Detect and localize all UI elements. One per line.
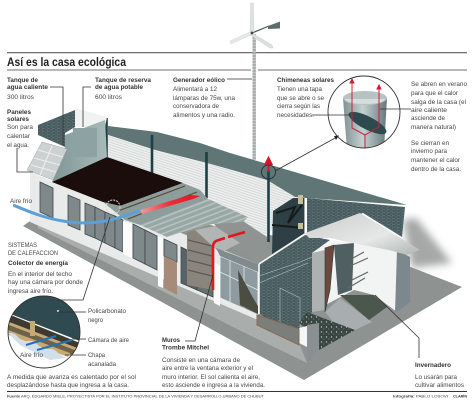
text: trombe wall: muro interior. El sol calienta el aire, (162, 375, 260, 381)
footer credits: Infografía: PABLO LOSOVI (393, 394, 448, 398)
icon: wind generator (230, 3, 280, 160)
text: heating systems: En el interior del techo (8, 272, 73, 278)
foundation (38, 215, 307, 363)
text: greenhouse (415, 363, 464, 389)
text: chimney notes (411, 82, 468, 173)
interior floor (213, 221, 305, 264)
plant bed (299, 312, 355, 350)
roof posts (106, 118, 268, 242)
text: trombe wall: Consiste en una cámara de (162, 358, 241, 364)
text: hot water tank: agua caliente (7, 85, 49, 91)
text: cold air: Aire frío (10, 199, 33, 205)
footer credits (7, 391, 467, 398)
text: heating systems: ingresa aire frío. (8, 289, 53, 295)
text: solar chimneys: Tienen una tapa (277, 87, 323, 93)
leader lines (17, 79, 419, 358)
roof rails section (103, 183, 208, 225)
text: chimney notes: Se abren en verano (411, 82, 468, 88)
text: chimney notes: invierno para (411, 149, 448, 155)
corrugated roof (140, 199, 248, 237)
text: chimney notes: Se cierran en (411, 141, 449, 147)
text: trombe wall: esto asciende e ingresa a la vivienda. (162, 383, 265, 389)
low pier (299, 326, 307, 347)
text: collector labels: negro (88, 318, 104, 324)
text: heating systems (8, 243, 84, 295)
text: hot water tank: Tanque de (7, 78, 39, 84)
brown lower window (257, 315, 299, 345)
text: solar panels (7, 110, 34, 149)
text: solar panels: el agua. (7, 143, 29, 149)
text: greenhouse: Invernadero (415, 363, 451, 369)
front wall (30, 172, 258, 320)
greenhouse floor (325, 298, 372, 330)
text: heating systems: DE CALEFACCION (8, 251, 58, 257)
text: wind generator: lámparas de 75w, una (173, 96, 236, 102)
text: chimney notes: aire caliente (411, 108, 448, 114)
text: reserve tank (95, 78, 152, 101)
text: solar panels: Son para (7, 125, 34, 131)
text: solar chimneys (277, 78, 335, 119)
house illustration (13, 108, 462, 380)
text: solar chimneys: Chimeneas solares (277, 78, 335, 84)
hot water tank enclosure (38, 108, 107, 182)
text: greenhouse: cultivar alimentos (415, 383, 464, 389)
text: heating systems: Colector de energía (8, 261, 69, 267)
text: chimney notes: para que el calor (411, 91, 458, 97)
title block: Así es la casa ecológica (7, 55, 126, 69)
text: trombe wall: aire entre la ventana exterior y el (162, 366, 253, 372)
text: collector labels: Chapa (88, 353, 106, 359)
small detail circle on roof (106, 200, 120, 214)
ground slab (23, 200, 462, 380)
warm air arrow (140, 195, 200, 214)
gable top wall (307, 198, 405, 237)
text: collector labels (20, 309, 130, 368)
footer credits: CLARÍN (453, 394, 467, 398)
text: wind generator (173, 78, 236, 119)
text: trombe wall (162, 338, 265, 389)
text: wind generator: Generador eólico (173, 78, 225, 84)
text: collector labels: acanalada (88, 362, 117, 368)
text: hot water tank (7, 78, 49, 101)
text: hot water tank: 300 litros (7, 95, 34, 101)
front gable wall (259, 235, 330, 343)
text: chimney notes: salga de la casa (el (411, 100, 466, 106)
text: trombe wall: Muros (162, 338, 181, 344)
cast shadow (403, 218, 452, 268)
chimney detail circle (328, 76, 400, 150)
text: solar chimneys: necesidades. (277, 113, 314, 119)
windows (40, 182, 213, 297)
arrow to chimney detail (275, 136, 339, 171)
text: solar chimneys: cierra según las (277, 104, 320, 110)
text: solar chimneys: que se abre o se (277, 96, 325, 102)
text: chimney notes: dentro de la casa. (411, 167, 461, 173)
text: collector note: desplazándose hasta que ingresa a la casa. (7, 383, 129, 389)
footer credits: Fuente ARQ. EDGARDO MIELE, PROYECTISTA POR EL INSTITUTO PROVINCIAL DE LA VIVIENDA Y DESARROLLO URBANO DE CHUBUT (7, 394, 265, 398)
text: heating systems: hay una cámara por donde (8, 280, 84, 286)
right white room (312, 240, 410, 313)
text: heating systems: SISTEMAS (8, 243, 37, 249)
text: chimney notes: asciende de (411, 116, 446, 122)
text: chimney notes: manera natural) (411, 125, 456, 131)
text: collector labels: Policarbonato (88, 309, 127, 315)
red warm air ducts (213, 232, 245, 290)
text: collector labels: Aire frío (20, 353, 44, 359)
chimney highlight circle (262, 165, 276, 179)
trombe wall section (187, 226, 258, 290)
collector detail circle (8, 296, 80, 368)
text: solar panels: solares (7, 117, 30, 123)
rear roof (108, 126, 407, 205)
text: wind generator: Alimentará a 12 (173, 87, 218, 93)
text: greenhouse: Lo usarán para (415, 375, 458, 381)
text: trombe wall: Trombe Mitchel (162, 346, 209, 352)
black polycarbonate roof (52, 157, 183, 206)
text: collector note: A medida que avanza es calentado por el sol (7, 375, 136, 381)
white piers (123, 221, 220, 306)
attic opening (272, 195, 305, 254)
text: reserve tank: de agua potable (95, 85, 144, 91)
chimney red arrow (266, 158, 272, 172)
glazed room (220, 256, 258, 315)
text: solar panels: Paneles (7, 110, 32, 116)
cold air arrow (13, 205, 142, 223)
text: chimney notes: mantener el calor (411, 158, 460, 164)
solar panels (27, 142, 67, 180)
raised bed (340, 295, 387, 320)
canopy (305, 213, 420, 255)
text: collector labels: Cámara de aire (88, 338, 130, 344)
text: wind generator: alimentos y una radio. (173, 113, 235, 119)
text: reserve tank: 600 litros (95, 95, 122, 101)
text: wind generator: conservadora de (173, 104, 220, 110)
brown door panel (164, 256, 177, 295)
rear siding wall (108, 135, 295, 243)
text: collector note (7, 375, 136, 389)
text: solar panels: calentar (7, 134, 30, 140)
text: reserve tank: Tanque de reserva (95, 78, 152, 84)
